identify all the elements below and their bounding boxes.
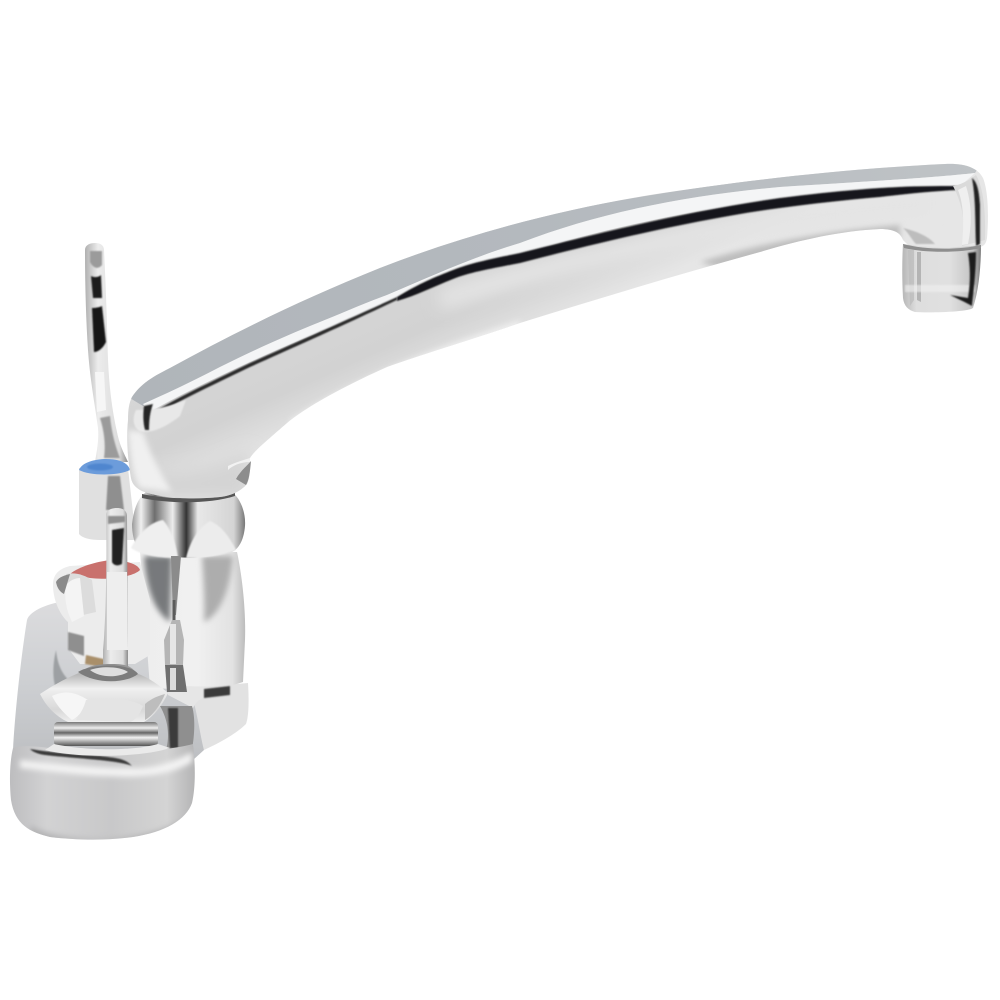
chrome highlight band <box>143 173 975 412</box>
front-left corner highlight <box>134 400 186 432</box>
aerator outlet <box>902 244 981 312</box>
spout right-end corner <box>953 175 985 246</box>
top face <box>125 158 985 406</box>
soft shading on spout body <box>134 458 249 498</box>
rear deck plate <box>13 601 249 765</box>
hot lever handle <box>103 508 128 666</box>
small swivel screw <box>236 461 251 485</box>
column dome collar <box>131 492 245 558</box>
spout <box>125 158 988 500</box>
thin dark reflection line <box>150 297 397 418</box>
dark reflection band <box>397 186 958 301</box>
front base <box>10 744 195 842</box>
hot handle cap with red indicator <box>53 560 150 668</box>
hot valve nut <box>40 664 194 750</box>
chrome ledge <box>167 684 231 708</box>
threaded collar <box>54 722 158 746</box>
cold lever handle <box>85 243 128 462</box>
lower body of the spout column <box>140 552 245 708</box>
illustration: chrome deck-mount faucet <box>10 164 988 840</box>
valve rod and coupling <box>164 556 187 692</box>
underside fillet <box>903 228 935 244</box>
cold cap with blue indicator <box>79 459 136 540</box>
